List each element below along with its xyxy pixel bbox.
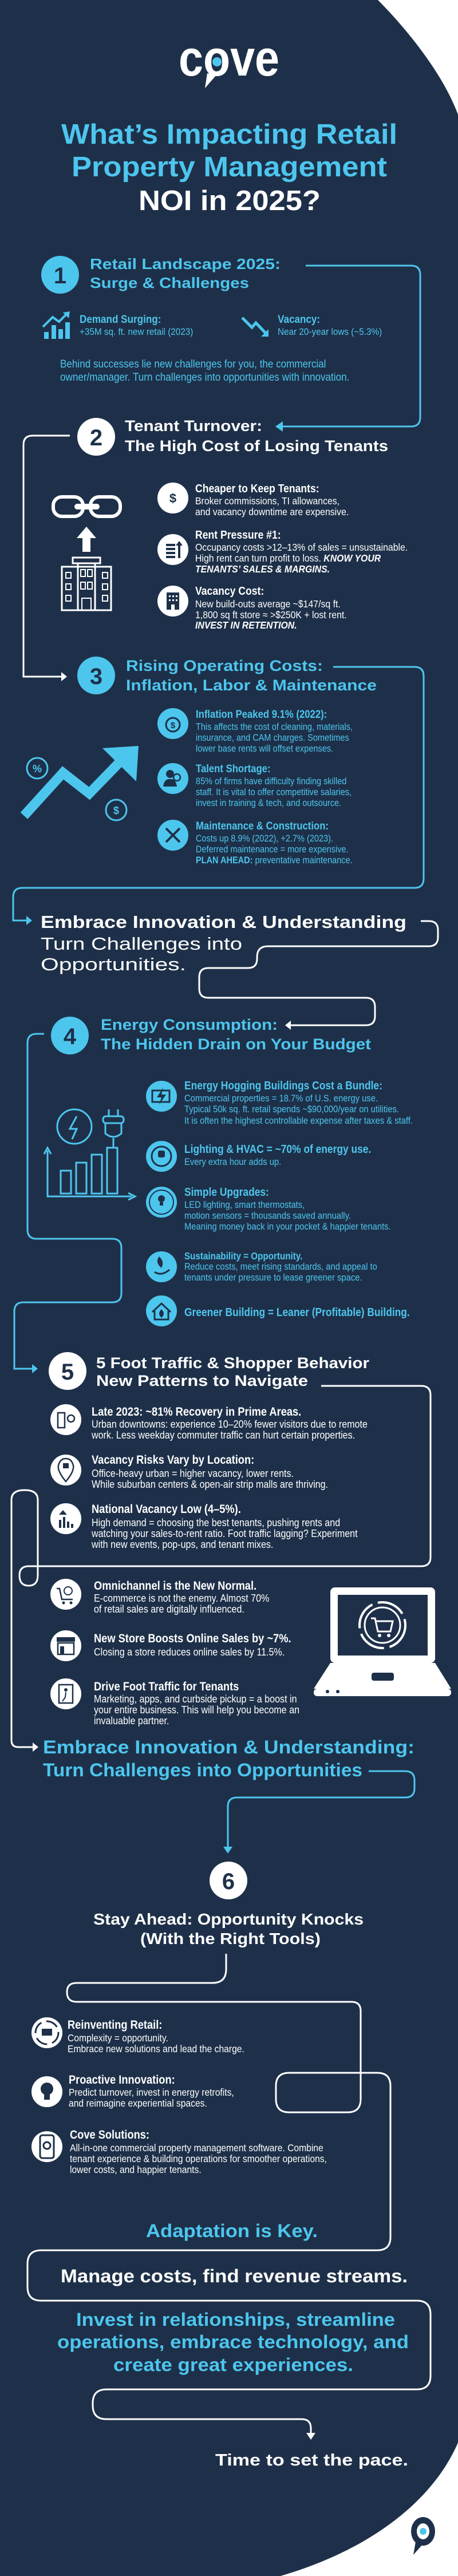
item: simple upgrades: motion sensors = thousands saved annually. <box>184 1211 351 1221</box>
heading: embrace innovation 2: Turn Challenges into Opportunities <box>43 1760 362 1780</box>
item: vacancy risks: While suburban centers & open-air strip malls are thriving. <box>92 1478 328 1490</box>
icon: laptop with cart <box>314 1587 451 1696</box>
item: vacancy risks <box>50 1453 328 1490</box>
arrow: section 4 to 5 <box>14 1034 121 1373</box>
item: simple upgrades: LED lighting, smart thermostats, <box>184 1200 305 1210</box>
section 5 heading <box>49 1352 370 1390</box>
item: rent pressure <box>157 528 408 575</box>
item: maintenance: Costs up 8.9% (2022), +2.7% (2023). <box>196 833 333 844</box>
text: manage costs: Manage costs, find revenue streams. <box>61 2266 408 2286</box>
item: cove solutions: Cove Solutions: <box>70 2128 149 2142</box>
item: talent shortage: Talent Shortage: <box>196 762 271 775</box>
item: cove solutions: tenant experience & building operations for smoother operations, <box>70 2153 327 2164</box>
item: vacancy risks: Vacancy Risks Vary by Location: <box>92 1453 254 1467</box>
item: rent pressure: High rent can turn profit to loss. KNOW YOUR <box>195 552 381 564</box>
arrow: section 1 to 2 <box>275 266 420 432</box>
item: sustainability: tenants under pressure to lease greener space. <box>184 1273 362 1283</box>
arrow: section 5 loop to embrace 2 <box>11 1386 431 1752</box>
icon: cove pin logo <box>411 2517 435 2555</box>
item: new store boosts: Closing a store reduces online sales by 11.5%. <box>94 1646 285 1658</box>
item: energy hogging: Energy Hogging Buildings Cost a Bundle: <box>184 1079 382 1092</box>
item: rent pressure: Occupancy costs >12–13% of sales = unsustainable. <box>195 542 408 553</box>
icon: rising arrow chart <box>24 746 139 820</box>
item: energy hogging <box>146 1079 413 1126</box>
item: cheaper to keep tenants: and vacancy downtime are expensive. <box>195 506 349 517</box>
item: omnichannel: E-commerce is not the enemy. Almost 70% <box>94 1592 269 1604</box>
item: sustainability <box>146 1251 377 1283</box>
icon: rising arrow chart: % <box>33 763 42 775</box>
item: cheaper to keep tenants: Broker commissions, TI allowances, <box>195 495 339 507</box>
item: national vacancy: watching your sales-to-rent ratio. Foot traffic lagging? Experiment <box>91 1527 358 1539</box>
stat: demand surging <box>43 311 193 339</box>
item: simple upgrades: Simple Upgrades: <box>184 1186 269 1198</box>
section 5 heading: 5 Foot Traffic & Shopper Behavior <box>96 1354 370 1372</box>
icon: broken chain, arrow, building <box>53 497 120 610</box>
section 2 heading: 2 <box>90 425 102 451</box>
item: inflation: Inflation Peaked 9.1% (2022): <box>196 708 327 720</box>
item: inflation: lower base rents will offset expenses. <box>196 744 333 754</box>
item: rent pressure: Rent Pressure #1: <box>195 528 281 541</box>
item: simple upgrades: Meaning money back in your pocket & happier tenants. <box>184 1222 391 1232</box>
item: reinventing retail: Embrace new solutions and lead the charge. <box>68 2043 244 2055</box>
heading: embrace innovation 1: Opportunities. <box>41 954 186 974</box>
item: rent pressure: TENANTS’ SALES & MARGINS. <box>195 563 330 575</box>
item: drive foot traffic: invaluable partner. <box>94 1714 169 1726</box>
section 5 heading: 5 <box>61 1360 74 1385</box>
item: vacancy cost: Vacancy Cost: <box>195 584 264 597</box>
item: greener building: Greener Building = Leaner (Profitable) Building. <box>184 1306 410 1318</box>
intro text: Behind successes lie new challenges for you, the commercial <box>60 358 326 370</box>
section 3 heading: 3 <box>90 664 102 689</box>
intro text <box>60 358 349 383</box>
arrow: embrace 2 to section 6 <box>223 1771 414 1854</box>
icon: rising arrow chart: $ <box>113 805 119 816</box>
text: invest in relationships <box>57 2309 409 2375</box>
heading: embrace innovation 2: Embrace Innovation & Understanding: <box>43 1737 414 1757</box>
item: energy hogging: It is often the highest controllable expense after taxes & staff. <box>184 1116 413 1126</box>
item: maintenance: Maintenance & Construction: <box>196 820 329 832</box>
icon: energy chart <box>44 1109 135 1200</box>
item: inflation <box>157 708 353 754</box>
item: new store boosts <box>50 1630 291 1661</box>
section 3 heading: Rising Operating Costs: <box>126 657 323 674</box>
item: vacancy cost: New build-outs average ~$147/sq ft. <box>195 598 341 610</box>
item: vacancy cost <box>157 584 347 631</box>
item: energy hogging: Commercial properties = 18.7% of U.S. energy use. <box>184 1093 378 1104</box>
title: What’s Impacting Retail <box>61 119 397 150</box>
item: sustainability: Sustainability = Opportunity. <box>184 1251 302 1262</box>
heading: embrace innovation 1: Embrace Innovation & Understanding <box>41 912 406 932</box>
item: late 2023 recovery <box>50 1404 368 1441</box>
arrow: section 2 to 3 <box>23 436 70 681</box>
section 1 heading <box>41 255 281 294</box>
text: time to set the pace: Time to set the pace. <box>215 2451 408 2470</box>
item: cove solutions <box>31 2128 327 2175</box>
section 6 heading: Stay Ahead: Opportunity Knocks <box>93 1910 364 1928</box>
item: lighting hvac <box>146 1141 371 1172</box>
item: vacancy risks: Office-heavy urban = higher vacancy, lower rents. <box>92 1467 294 1479</box>
item: cove solutions: All-in-one commercial property management software. Combine <box>70 2142 323 2154</box>
item: maintenance: PLAN AHEAD: preventative maintenance. <box>196 855 353 866</box>
item: omnichannel: of retail sales are digitally influenced. <box>94 1603 244 1615</box>
item: simple upgrades <box>146 1186 391 1232</box>
item: talent shortage: invest in training & tech, and outsource. <box>196 798 341 808</box>
section 4 heading: The Hidden Drain on Your Budget <box>101 1036 371 1053</box>
stat: vacancy: Vacancy: <box>278 313 320 325</box>
arrow: section 3 to embrace <box>13 667 424 925</box>
title <box>61 119 397 216</box>
item: late 2023 recovery: Late 2023: ~81% Recovery in Prime Areas. <box>92 1405 301 1419</box>
item: talent shortage <box>157 762 352 808</box>
item: inflation: This affects the cost of cleaning, materials, <box>196 722 353 732</box>
item: inflation: $ <box>171 721 176 730</box>
item: reinventing retail <box>31 2017 244 2055</box>
section 5 heading: New Patterns to Navigate <box>96 1372 308 1389</box>
item: lighting hvac: Lighting & HVAC = ~70% of energy use. <box>184 1143 371 1155</box>
text: invest in relationships: create great experiences. <box>113 2354 353 2375</box>
section 6 heading: (With the Right Tools) <box>140 1930 321 1947</box>
item: omnichannel: Omnichannel is the New Normal. <box>94 1579 256 1593</box>
item: cheaper to keep tenants: $ <box>169 491 176 505</box>
item: proactive innovation: and reimagine experiential spaces. <box>69 2097 207 2109</box>
section 6 heading: 6 <box>222 1869 235 1894</box>
item: national vacancy: with new events, pop-ups, and tenant mixes. <box>91 1538 273 1550</box>
logo: cove: cove <box>179 30 279 86</box>
section 2 heading <box>77 417 388 456</box>
item: reinventing retail: Complexity = opportunity. <box>68 2032 168 2044</box>
section 2 heading: The High Cost of Losing Tenants <box>125 437 388 455</box>
heading: embrace innovation 1 <box>41 912 406 974</box>
heading: embrace innovation 1: Turn Challenges into <box>41 934 242 954</box>
item: late 2023 recovery: work. Less weekday commuter traffic can hurt certain properties. <box>91 1429 355 1441</box>
section 1 heading: Surge & Challenges <box>90 274 249 291</box>
item: reinventing retail: Reinventing Retail: <box>68 2018 162 2032</box>
title: NOI in 2025? <box>139 185 321 216</box>
section 4 heading: 4 <box>64 1024 77 1049</box>
item: maintenance: Deferred maintenance = more expensive. <box>196 844 349 855</box>
item: talent shortage: staff. It is vital to offer competitive salaries, <box>196 787 352 797</box>
text: invest in relationships: operations, embrace technology, and <box>57 2332 409 2352</box>
item: sustainability: Reduce costs, meet rising standards, and appeal to <box>184 1262 377 1272</box>
item: proactive innovation <box>31 2073 234 2109</box>
item: energy hogging: Typical 50k sq. ft. retail spends ~$90,000/year on utilities. <box>184 1104 399 1115</box>
heading: embrace innovation 2 <box>43 1737 414 1780</box>
item: proactive innovation: Predict turnover, invest in energy retrofits, <box>69 2087 234 2098</box>
item: drive foot traffic <box>50 1678 299 1726</box>
section 3 heading: Inflation, Labor & Maintenance <box>126 677 377 694</box>
section 4 heading: Energy Consumption: <box>101 1016 278 1033</box>
stat: vacancy <box>242 313 382 337</box>
section 1 heading: Retail Landscape 2025: <box>90 255 281 272</box>
item: new store boosts: New Store Boosts Online Sales by ~7%. <box>94 1632 291 1645</box>
item: lighting hvac: Every extra hour adds up. <box>184 1157 281 1167</box>
item: drive foot traffic: your entire business. This will help you become an <box>94 1704 299 1716</box>
item: cheaper to keep tenants: Cheaper to Keep Tenants: <box>195 482 319 495</box>
item: vacancy cost: INVEST IN RETENTION. <box>195 619 297 631</box>
item: omnichannel <box>50 1579 269 1615</box>
intro text: owner/manager. Turn challenges into opportunities with innovation. <box>60 371 349 383</box>
item: drive foot traffic: Marketing, apps, and curbside pickup = a boost in <box>94 1693 297 1705</box>
item: national vacancy: High demand = choosing the best tenants, pushing rents and <box>92 1516 340 1528</box>
item: national vacancy: National Vacancy Low (4–5%). <box>92 1503 241 1516</box>
item: late 2023 recovery: Urban downtowns: experience 10–20% fewer visitors due to remote <box>92 1418 368 1430</box>
item: maintenance <box>157 820 353 866</box>
section 3 heading <box>77 657 377 694</box>
item: drive foot traffic: Drive Foot Traffic for Tenants <box>94 1680 239 1693</box>
item: vacancy cost: 1,800 sq ft store ≈ >$250K + lost rent. <box>195 609 347 621</box>
arrow: section 6 winding path to end <box>27 1954 431 2440</box>
title: Property Management <box>72 152 387 183</box>
text: adaptation is key: Adaptation is Key. <box>146 2221 318 2241</box>
arrow: embrace to section 4 <box>199 921 438 1030</box>
item: proactive innovation: Proactive Innovation: <box>69 2073 175 2087</box>
stat: demand surging: Demand Surging: <box>80 313 161 325</box>
section 4 heading <box>51 1016 371 1054</box>
item: talent shortage: 85% of firms have difficulty finding skilled <box>196 776 346 787</box>
item: inflation: insurance, and CAM charges. Sometimes <box>196 733 349 743</box>
stat: demand surging: +35M sq. ft. new retail (2023) <box>80 326 193 337</box>
item: greener building <box>146 1295 410 1326</box>
item: cove solutions: lower costs, and happier tenants. <box>70 2164 202 2175</box>
item: national vacancy <box>50 1503 358 1550</box>
stat: vacancy: Near 20-year lows (~5.3%) <box>278 326 382 337</box>
section 6 heading <box>93 1862 364 1947</box>
section 1 heading: 1 <box>54 263 66 289</box>
section 2 heading: Tenant Turnover: <box>125 417 262 434</box>
item: cheaper to keep tenants <box>157 482 349 517</box>
text: invest in relationships: Invest in relationships, streamline <box>76 2309 395 2330</box>
